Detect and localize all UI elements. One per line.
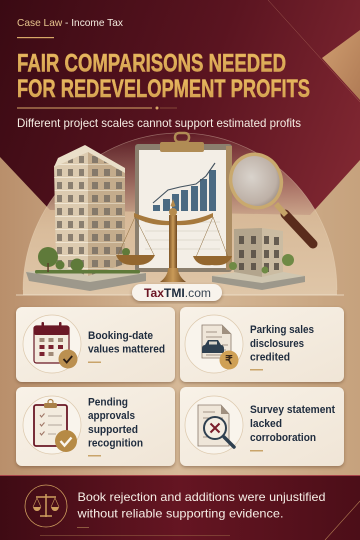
conclusion text [76,490,326,520]
card text: values mattered [88,344,165,356]
subtitle: Different project scales cannot support estimated profits [17,116,301,130]
balance scale [116,199,232,282]
icon: calendar [23,315,81,373]
card text: Pending [88,396,128,408]
icon: scales [25,485,67,527]
brand pill [132,284,222,301]
brand pill: TaxTMI.com [144,288,211,300]
card: pending approvals [16,387,175,466]
card text [250,404,335,444]
card text: corroboration [250,432,316,444]
icon: car document [185,315,243,373]
magnifying glass [222,146,313,244]
card: booking-date [16,307,175,382]
card: parking [180,307,344,382]
card text: Booking-date [88,330,153,342]
divider [17,37,54,38]
decorative diamond top right [268,0,360,102]
small building [212,228,305,290]
card text: supported [88,424,138,436]
card text [250,324,314,364]
card text: Parking sales [250,324,314,336]
card text [88,396,143,450]
clipboard [135,133,232,272]
icon: document magnifier [185,396,243,454]
card text [88,330,165,356]
card text: lacked [250,418,282,430]
category label: Case Law - Income Tax [17,17,124,29]
conclusion text: without reliable supporting evidence. [76,506,284,520]
title rule [17,106,177,110]
large building [26,145,146,291]
card text: recognition [88,438,143,450]
conclusion text: Book rejection and additions were unjustified [78,490,326,504]
card text: credited [250,352,290,364]
icon: clipboard checklist [23,396,81,454]
card text: disclosures [250,338,304,350]
illustration [26,133,313,291]
card: survey statement [180,387,344,466]
icon: car document: ₹ [225,353,233,367]
title [17,50,310,103]
bottom band [0,475,360,540]
card text: approvals [88,410,135,422]
card text: Survey statement [250,404,335,416]
